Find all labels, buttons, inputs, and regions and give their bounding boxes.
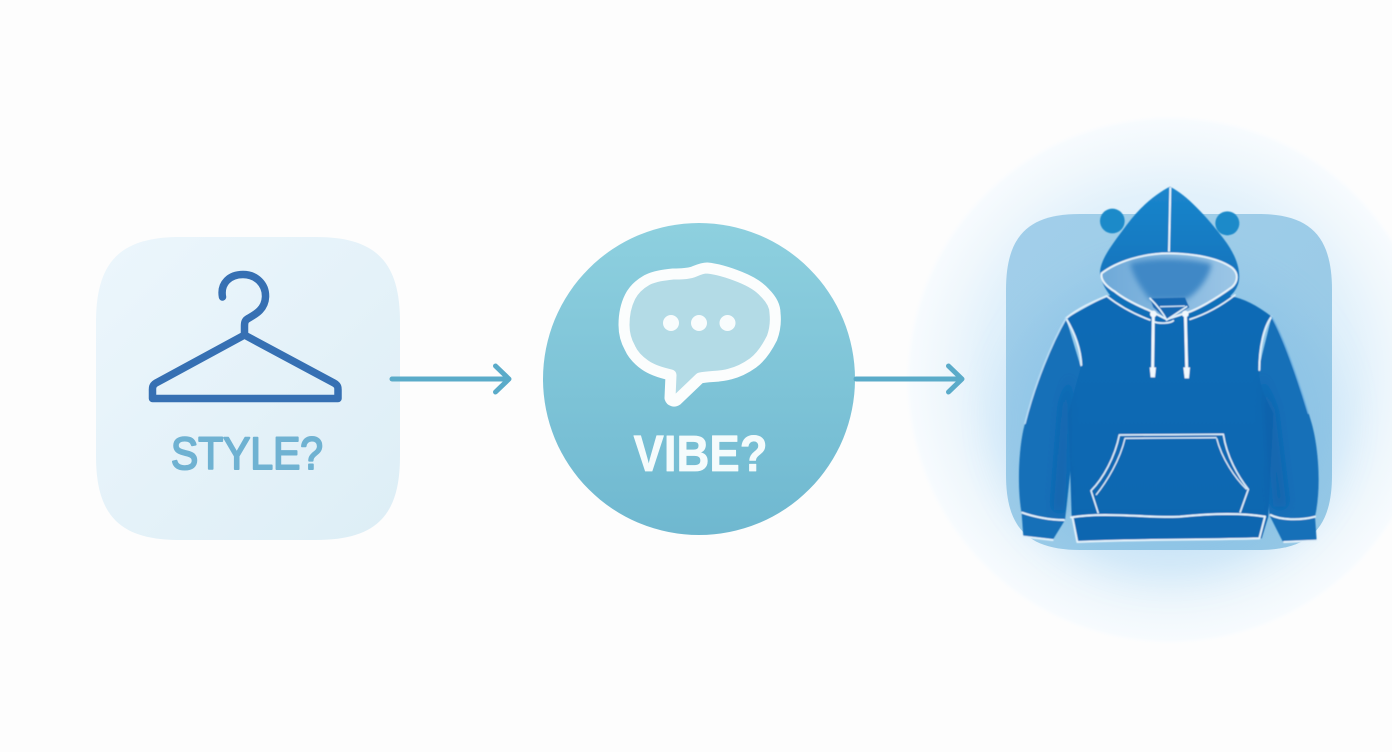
drawstring tips bbox=[1150, 311, 1190, 378]
panel: vibe bbox=[543, 223, 855, 535]
sleeve inner shading bbox=[1053, 377, 1287, 510]
neck V seams bbox=[1107, 295, 1235, 323]
illustration: hoodie bbox=[1019, 187, 1319, 543]
hood outer bbox=[1100, 187, 1239, 323]
hoodie panel background bbox=[1006, 214, 1332, 550]
panel: hoodie result bbox=[1000, 187, 1340, 575]
armhole and shoulder seams bbox=[1025, 296, 1308, 423]
label: STYLE?: STYLE? bbox=[171, 428, 323, 479]
drawstrings bbox=[1153, 313, 1187, 367]
collar inner dark bbox=[1150, 298, 1189, 320]
cuffs and hem bbox=[1022, 513, 1317, 542]
kangaroo pocket bbox=[1091, 434, 1248, 513]
label: VIBE?: VIBE? bbox=[634, 425, 768, 482]
arrow: style to vibe bbox=[392, 366, 509, 392]
arrow: vibe to hoodie bbox=[856, 366, 962, 392]
style panel background bbox=[96, 237, 400, 540]
hoodie shadow glow bbox=[1000, 265, 1340, 575]
lining shadow bbox=[1130, 259, 1212, 300]
hood lining bbox=[1101, 253, 1237, 319]
halo glow behind hoodie bbox=[905, 115, 1392, 645]
hood centre seam bbox=[1169, 187, 1170, 252]
icon: speech bubble bbox=[624, 268, 775, 401]
bubble dots bbox=[663, 315, 736, 331]
hood ears bbox=[1100, 209, 1239, 235]
left sleeve bbox=[1019, 318, 1082, 540]
bubble outline and fill bbox=[624, 268, 775, 401]
panel: style bbox=[96, 237, 400, 540]
right sleeve bbox=[1258, 317, 1319, 543]
vibe circle bbox=[543, 223, 855, 535]
icon: hanger bbox=[152, 274, 338, 398]
torso bbox=[1066, 287, 1273, 542]
